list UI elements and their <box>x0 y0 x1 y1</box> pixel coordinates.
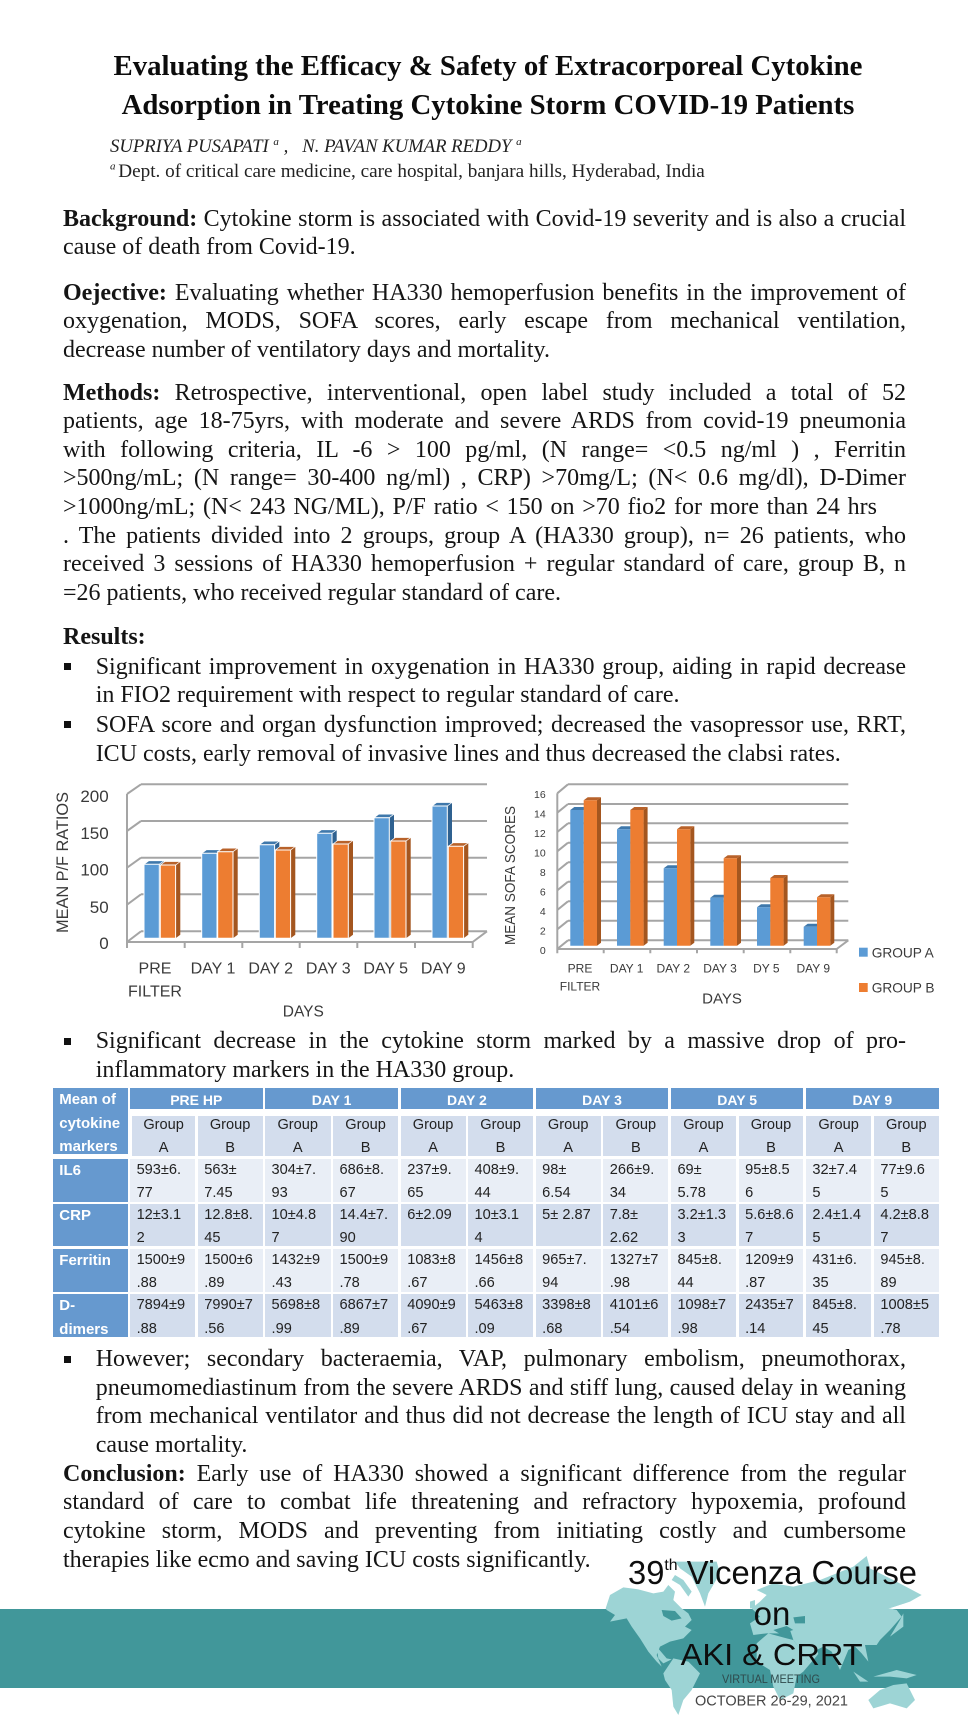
row: D-dimers: 7990±7 <box>204 1297 253 1313</box>
row: D-dimers: .56 <box>204 1320 225 1336</box>
row: D-dimers: 45 <box>812 1320 829 1336</box>
row: CRP: 2 <box>137 1230 145 1246</box>
legend <box>859 945 935 995</box>
x axis categories: DAY 2 <box>657 962 690 976</box>
logo title: on <box>754 1595 790 1632</box>
row: IL6: 5 <box>880 1185 889 1201</box>
row: D-dimers: 1008±5 <box>880 1297 929 1313</box>
x axis categories: FILTER <box>128 984 182 1000</box>
row: IL6: 593±6. <box>137 1162 181 1178</box>
row: D-dimers: .68 <box>542 1320 562 1336</box>
y axis values: 200 <box>80 787 109 806</box>
x axis categories: PRE <box>568 962 592 976</box>
row: Ferritin: 35 <box>812 1275 829 1291</box>
title: Evaluating the Efficacy & Safety of Extracorporeal Cytokine <box>114 50 862 82</box>
row: D-dimers: 4090±9 <box>407 1297 456 1313</box>
legend: GROUP A <box>872 945 935 960</box>
methods paragraph: patients, age 18-75yrs, with moderate and severe ARDS from covid-19 pneumonia <box>63 408 906 434</box>
group header row: Group <box>683 1117 724 1133</box>
conclusion paragraph: standard of care to combat life threatening and refractory hypoxemia, profound <box>63 1489 906 1515</box>
table corner header <box>53 1088 128 1154</box>
bullet marker <box>64 1038 71 1045</box>
methods paragraph: with following criteria, IL -6 > 100 pg/ml, (N range= <0.5 ng/ml ) , Ferritin <box>63 437 906 463</box>
row: CRP: 3.2±1.3 <box>677 1207 726 1223</box>
y axis values: 12 <box>534 828 546 840</box>
row: D-dimers: 4101±6 <box>610 1297 658 1313</box>
x axis categories: DAY 3 <box>703 962 737 976</box>
x axis categories: DAY 9 <box>797 962 830 976</box>
y axis values: 2 <box>540 925 546 937</box>
day header row: PRE HP <box>170 1092 222 1108</box>
row: Ferritin: 431±6. <box>812 1252 857 1268</box>
day header row: DAY 5 <box>717 1092 757 1108</box>
day header row: DAY 9 <box>852 1092 892 1108</box>
background paragraph <box>63 206 906 260</box>
group header row: B <box>361 1140 370 1156</box>
group header row: Group <box>277 1117 318 1133</box>
row: Ferritin: 1456±8 <box>474 1252 523 1268</box>
row: Ferritin: 1500±6 <box>204 1252 253 1268</box>
group header row: Group <box>548 1117 588 1133</box>
title: Adsorption in Treating Cytokine Storm COVID-19 Patients <box>122 88 854 120</box>
row: IL6: 408±9. <box>474 1162 519 1178</box>
background paragraph: cause of death from Covid-19. <box>63 234 356 260</box>
methods paragraph: =26 patients, who received regular standard of care. <box>63 580 561 606</box>
y axis values <box>80 787 109 953</box>
complications bullet <box>96 1346 906 1458</box>
results bullet 2: ICU costs, early removal of invasive lines and thus decreased the clabsi rates. <box>96 741 841 767</box>
chart: mean SOFA scores <box>503 783 935 1008</box>
logo title: 39 <box>628 1554 665 1591</box>
x axis title: DAYS <box>283 1004 324 1020</box>
chart grid <box>557 784 848 953</box>
row: Ferritin: 44 <box>677 1275 694 1291</box>
results bullet 2 <box>96 712 906 767</box>
conclusion paragraph <box>63 1461 906 1573</box>
x axis categories: DAY 2 <box>248 960 293 978</box>
x axis categories: DAY 9 <box>421 960 466 978</box>
results heading: Results: <box>63 624 146 650</box>
y axis values: 4 <box>540 906 546 918</box>
row: D-dimers: .78 <box>880 1320 901 1336</box>
day header row: DAY 1 <box>312 1092 351 1108</box>
x axis categories <box>128 960 466 1000</box>
methods paragraph: >1000ng/mL; (N< 243 NG/ML), P/F ratio < 150 on >70 fio2 for more than 24 hrs <box>63 494 877 520</box>
row: IL6: 5.78 <box>677 1185 706 1201</box>
row: Ferritin: 845±8. <box>677 1252 722 1268</box>
methods paragraph: Methods: Retrospective, interventional, open label study included a total of 52 <box>63 380 906 406</box>
row: Ferritin: 1083±8 <box>407 1252 456 1268</box>
day header row: DAY 3 <box>582 1092 622 1108</box>
row: CRP: CRP <box>59 1207 91 1224</box>
row: D-dimers: .14 <box>745 1320 765 1336</box>
row: IL6: 77±9.6 <box>880 1162 925 1178</box>
y axis values: 10 <box>534 847 546 859</box>
cytokine bullet: Significant decrease in the cytokine storm marked by a massive drop of pro- <box>96 1028 906 1054</box>
table corner header: markers <box>59 1138 118 1155</box>
group header row: B <box>766 1140 776 1156</box>
complications bullet: However; secondary bacteraemia, VAP, pulmonary embolism, pneumothorax, <box>96 1346 906 1372</box>
row: CRP: 4 <box>474 1230 483 1246</box>
affiliation: a Dept. of critical care medicine, care hospital, banjara hills, Hyderabad, India <box>110 161 705 182</box>
row: Ferritin: 1327±7 <box>610 1252 658 1268</box>
row: CRP: 5 <box>812 1230 821 1246</box>
methods paragraph: received 3 sessions of HA330 hemoperfusion + regular standard of care, group B, n <box>63 551 906 577</box>
row: IL6: 304±7. <box>272 1162 316 1178</box>
complications bullet: cause mortality. <box>96 1432 247 1458</box>
group header row: A <box>428 1140 438 1156</box>
day header row: DAY 2 <box>447 1092 487 1108</box>
y axis values: 50 <box>90 898 109 917</box>
group header row: Group <box>480 1117 521 1133</box>
row: D-dimers: .99 <box>272 1320 292 1336</box>
row: Ferritin: 89 <box>880 1275 897 1291</box>
row: CRP: 6±2.09 <box>407 1207 452 1223</box>
day header row <box>130 1088 939 1109</box>
row: D-dimers: 6867±7 <box>340 1297 388 1313</box>
row: Ferritin: .67 <box>407 1275 428 1291</box>
y axis values: 16 <box>534 789 546 801</box>
conclusion paragraph: therapies like ecmo and saving ICU costs significantly. <box>63 1547 591 1573</box>
row: IL6: 98± <box>542 1162 566 1178</box>
row: D-dimers: 5463±8 <box>474 1297 523 1313</box>
row: CRP: 90 <box>340 1230 356 1246</box>
footer logo band <box>0 1554 968 1715</box>
row: Ferritin: 1500±9 <box>137 1252 185 1268</box>
row: D-dimers: D- <box>59 1297 75 1314</box>
row: IL6: 67 <box>340 1185 356 1201</box>
y axis values: 100 <box>80 861 109 880</box>
row: Ferritin: 965±7. <box>542 1252 587 1268</box>
row: IL6: 686±8. <box>340 1162 384 1178</box>
row: D-dimers: 7894±9 <box>137 1297 185 1313</box>
group B bars <box>584 797 834 946</box>
row: IL6: 77 <box>137 1185 153 1201</box>
row: D-dimers: .09 <box>474 1320 495 1336</box>
y axis values <box>534 789 546 957</box>
bullet marker <box>64 721 71 728</box>
results bullet 1: Significant improvement in oxygenation in HA330 group, aiding in rapid decrease <box>96 654 906 680</box>
table corner header: Mean of <box>59 1091 116 1108</box>
group header row: Group <box>886 1117 927 1133</box>
objective paragraph: decrease number of ventilatory days and mortality. <box>63 337 550 363</box>
row: IL6: 7.45 <box>204 1185 233 1201</box>
x axis categories: DAY 1 <box>610 962 644 976</box>
row: Ferritin: 1432±9 <box>272 1252 320 1268</box>
row: Ferritin: .78 <box>340 1275 360 1291</box>
teal band <box>0 1609 968 1688</box>
methods paragraph: >500ng/mL; (N range= 30-400 ng/ml) , CRP) >70mg/L; (N< 0.6 mg/dl), D-Dimer <box>63 465 906 491</box>
row: D-dimers: .67 <box>407 1320 428 1336</box>
row: D-dimers <box>53 1294 939 1337</box>
group header row: A <box>293 1140 303 1156</box>
group header row: B <box>496 1140 505 1156</box>
logo title: AKI & CRRT <box>681 1637 863 1672</box>
complications bullet: from mechanical ventilator and thus did not decrease the length of ICU stay and all <box>96 1403 906 1429</box>
logo title: th <box>664 1557 678 1574</box>
row: CRP: 7 <box>880 1230 889 1246</box>
row: Ferritin: .43 <box>272 1275 292 1291</box>
row: Ferritin: .66 <box>474 1275 495 1291</box>
row: CRP: 7 <box>745 1230 753 1246</box>
bullet marker <box>64 663 71 670</box>
group header row: A <box>159 1140 168 1156</box>
row: Ferritin: .89 <box>204 1275 225 1291</box>
row: D-dimers: 5698±8 <box>272 1297 320 1313</box>
row: IL6: 93 <box>272 1185 288 1201</box>
row: CRP: 10±3.1 <box>474 1207 519 1223</box>
row: D-dimers: .88 <box>137 1320 157 1336</box>
row: CRP: 5.6±8.6 <box>745 1207 794 1223</box>
group header row: Group <box>616 1117 656 1133</box>
date: OCTOBER 26-29, 2021 <box>695 1694 848 1710</box>
row: Ferritin: 945±8. <box>880 1252 925 1268</box>
authors: SUPRIYA PUSAPATI a , N. PAVAN KUMAR REDDY a <box>110 135 522 156</box>
group header row: A <box>699 1140 708 1156</box>
row: IL6: 69± <box>677 1162 702 1178</box>
group header row: Group <box>413 1117 453 1133</box>
row: Ferritin: .98 <box>610 1275 630 1291</box>
row: D-dimers: 3398±8 <box>542 1297 591 1313</box>
icon: world map <box>606 1556 922 1715</box>
y axis values: 8 <box>540 867 546 879</box>
logo title <box>628 1554 917 1672</box>
table corner header: cytokine <box>59 1115 120 1132</box>
row: CRP: 14.4±7. <box>340 1207 388 1223</box>
row: IL6: 237±9. <box>407 1162 452 1178</box>
row: Ferritin: 94 <box>542 1275 558 1291</box>
group header row: Group <box>345 1117 386 1133</box>
row: CRP: 2.4±1.4 <box>812 1207 861 1223</box>
row: CRP: 7 <box>272 1230 280 1246</box>
group header row: B <box>631 1140 641 1156</box>
row: CRP: 10±4.8 <box>272 1207 316 1223</box>
row: D-dimers: 845±8. <box>812 1297 857 1313</box>
row: CRP: 3 <box>677 1230 686 1246</box>
row: IL6: 6 <box>745 1185 753 1201</box>
group A bars <box>570 807 821 946</box>
row: Ferritin: 1500±9 <box>340 1252 388 1268</box>
x axis categories <box>560 962 830 994</box>
virtual meeting label: VIRTUAL MEETING <box>722 1674 820 1686</box>
bullet marker <box>64 1356 71 1363</box>
y axis values: 0 <box>99 934 109 953</box>
group header row: B <box>225 1140 235 1156</box>
x axis title: DAYS <box>702 990 742 1008</box>
row: IL6: 6.54 <box>542 1185 571 1201</box>
row: D-dimers: .89 <box>340 1320 360 1336</box>
row: IL6: 44 <box>474 1185 491 1201</box>
title <box>114 50 862 120</box>
row: CRP <box>53 1204 939 1246</box>
group header row: Group <box>210 1117 250 1133</box>
objective paragraph <box>63 280 906 363</box>
cytokine bullet: inflammatory markers in the HA330 group. <box>96 1057 514 1083</box>
row: IL6: 95±8.5 <box>745 1162 790 1178</box>
row: CRP: 4.2±8.8 <box>880 1207 929 1223</box>
row: Ferritin <box>53 1249 939 1292</box>
group header row: Group <box>143 1117 184 1133</box>
row: Ferritin: .87 <box>745 1275 765 1291</box>
objective paragraph: oxygenation, MODS, SOFA scores, early escape from mechanical ventilation, <box>63 308 906 334</box>
x axis categories: DAY 1 <box>191 960 235 978</box>
row: IL6 <box>53 1159 939 1202</box>
methods paragraph <box>63 380 906 606</box>
row: IL6: 5 <box>812 1185 821 1201</box>
y axis values: 150 <box>80 824 109 843</box>
row: CRP: 45 <box>204 1230 220 1246</box>
results bullet 1 <box>96 654 906 708</box>
x axis categories: FILTER <box>560 980 601 994</box>
row: CRP: 2.62 <box>610 1230 638 1246</box>
row: D-dimers: .54 <box>610 1320 630 1336</box>
x axis categories: DAY 3 <box>306 960 351 978</box>
y axis title: MEAN P/F RATIOS <box>53 792 72 933</box>
cytokine bullet <box>96 1028 906 1083</box>
group A bars <box>144 802 452 938</box>
y axis title: MEAN SOFA SCORES <box>503 806 519 945</box>
row: D-dimers: 2435±7 <box>745 1297 794 1313</box>
row: CRP: 5± 2.87 <box>542 1207 591 1223</box>
row: IL6: IL6 <box>59 1162 81 1179</box>
row: IL6: 34 <box>610 1185 626 1201</box>
logo title: Vicenza Course <box>678 1554 917 1591</box>
legend: GROUP B <box>872 980 935 995</box>
x axis categories: DAY 5 <box>363 960 408 978</box>
row: CRP: 12±3.1 <box>137 1207 181 1223</box>
row: IL6: 65 <box>407 1185 423 1201</box>
row: IL6: 563± <box>204 1162 237 1178</box>
row: Ferritin: Ferritin <box>59 1252 111 1269</box>
y axis values: 14 <box>534 808 546 820</box>
row: Ferritin: .88 <box>137 1275 157 1291</box>
conclusion paragraph: cytokine storm, MODS and preventing from initiating costly and cumbersome <box>63 1518 906 1544</box>
row: CRP: 12.8±8. <box>204 1207 253 1223</box>
methods paragraph: . The patients divided into 2 groups, group A (HA330 group), n= 26 patients, who <box>63 523 906 549</box>
chart grid <box>127 784 487 948</box>
group header row: A <box>834 1140 843 1156</box>
group header row: A <box>563 1140 573 1156</box>
row: IL6: 266±9. <box>610 1162 654 1178</box>
row: Ferritin: 1209±9 <box>745 1252 794 1268</box>
group header row <box>132 1116 939 1156</box>
row: CRP: 7.8± <box>610 1207 638 1223</box>
group header row: B <box>901 1140 911 1156</box>
conclusion paragraph: Conclusion: Early use of HA330 showed a significant difference from the regular <box>63 1461 906 1487</box>
results bullet 2: SOFA score and organ dysfunction improved; decreased the vasopressor use, RRT, <box>96 712 906 738</box>
y axis values: 6 <box>540 886 546 898</box>
x axis categories: DY 5 <box>753 962 780 976</box>
row: D-dimers: 1098±7 <box>677 1297 726 1313</box>
y axis values: 0 <box>540 945 546 957</box>
group header row: Group <box>818 1117 859 1133</box>
group header row: Group <box>751 1117 791 1133</box>
complications bullet: pneumomediastinum from the severe ARDS and stiff lung, caused delay in weaning <box>96 1375 906 1401</box>
results bullet 1: in FIO2 requirement with respect to regular standard of care. <box>96 682 679 708</box>
group B bars <box>160 838 468 938</box>
row: IL6: 32±7.4 <box>812 1162 857 1178</box>
objective paragraph: Oejective: Evaluating whether HA330 hemoperfusion benefits in the improvement of <box>63 280 906 306</box>
table: cytokine markers <box>53 1088 939 1337</box>
chart: mean P/F ratios <box>53 783 488 1020</box>
background paragraph: Background: Cytokine storm is associated with Covid-19 severity and is also a crucial <box>63 206 906 232</box>
row: D-dimers: .98 <box>677 1320 698 1336</box>
x axis categories: PRE <box>139 960 171 978</box>
